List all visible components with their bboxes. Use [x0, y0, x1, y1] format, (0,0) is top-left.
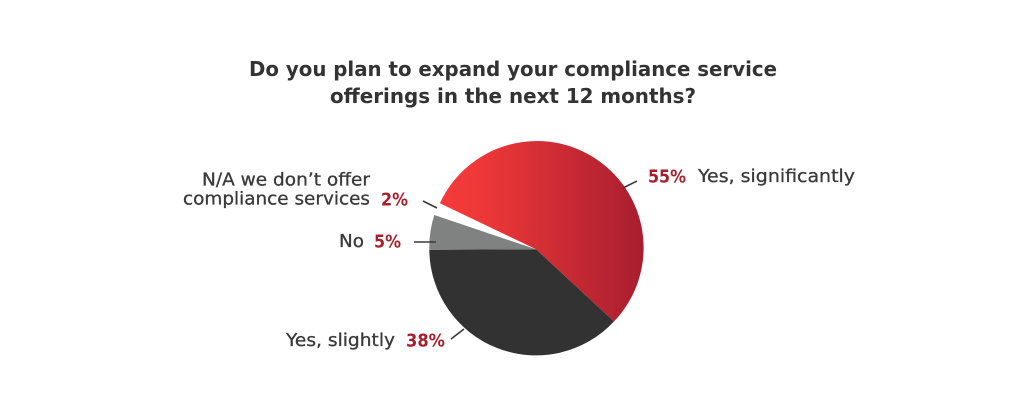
pie chart	[429, 141, 644, 355]
title	[249, 57, 777, 108]
label: yes slightly: 38%	[406, 330, 445, 352]
label: no	[339, 232, 436, 252]
slice: no 5%	[429, 215, 536, 250]
label: not applicable: N/A we don’t offer	[202, 170, 371, 190]
label: no: 5%	[374, 232, 401, 252]
label: yes significantly	[623, 166, 855, 188]
label: yes significantly: Yes, significantly	[697, 167, 855, 187]
label: not applicable: compliance services	[183, 190, 370, 210]
slice: yes significantly 55%	[440, 141, 644, 322]
label: yes significantly: 55%	[648, 166, 686, 188]
title: Do you plan to expand your compliance service	[249, 57, 777, 81]
slice: yes slightly 38%	[429, 249, 614, 355]
label: no: No	[339, 232, 364, 252]
label: yes slightly	[285, 329, 464, 352]
label: yes slightly: Yes, slightly	[285, 331, 395, 351]
title: offerings in the next 12 months?	[330, 84, 696, 108]
label: not applicable	[183, 170, 437, 210]
label: not applicable: 2%	[381, 190, 408, 210]
